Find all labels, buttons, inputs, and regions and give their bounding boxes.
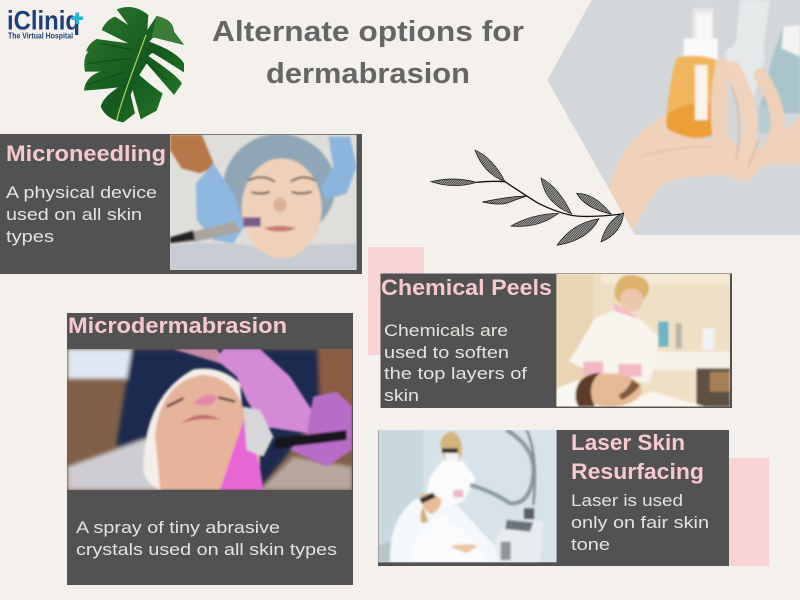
text: chemical peels description: the top layers of	[384, 364, 527, 383]
title: Alternate options for	[212, 16, 524, 48]
text: chemical peels description	[384, 321, 527, 405]
text: microneedling description: used on all skin	[6, 205, 142, 224]
text: laser skin resurfacing description	[571, 491, 709, 554]
heading: laser skin resurfacing: Resurfacing	[571, 459, 704, 484]
photo: chemical peel treatment	[556, 274, 730, 407]
panel: laser skin resurfacing	[378, 430, 729, 566]
photo: hand holding serum bottles	[540, 0, 800, 235]
panel: microneedling: Microneedling	[6, 141, 166, 166]
heading: laser skin resurfacing	[571, 430, 704, 484]
text: microdermabrasion description	[76, 518, 337, 559]
logo: iCliniq: The Virtual Hospital	[8, 32, 73, 40]
title: dermabrasion	[266, 58, 470, 90]
decoration: botanical sprig	[431, 150, 624, 245]
text: laser skin resurfacing description: tone	[571, 535, 610, 554]
text: microneedling description: A physical device	[6, 183, 157, 202]
text: laser skin resurfacing description: Laser is used	[571, 491, 683, 510]
panel: chemical peels	[380, 274, 732, 408]
panel: microdermabrasion	[67, 313, 353, 585]
text: laser skin resurfacing description: only on fair skin	[571, 513, 709, 532]
panel: microneedling	[0, 134, 362, 274]
text: microneedling description: types	[6, 227, 54, 246]
text: chemical peels description: used to soften	[384, 343, 509, 362]
photo: microdermabrasion treatment	[67, 349, 352, 490]
title	[212, 16, 524, 90]
icon: logo plus	[72, 12, 83, 24]
photo: microneedling treatment	[170, 134, 357, 270]
text: chemical peels description: Chemicals are	[384, 321, 508, 340]
text: microneedling description	[6, 183, 157, 246]
text: chemical peels description: skin	[384, 386, 419, 405]
text: microdermabrasion description: A spray of tiny abrasive	[76, 518, 280, 537]
panel: microdermabrasion: Microdermabrasion	[68, 313, 287, 338]
logo: iCliniq: iCliniq	[7, 6, 80, 36]
accent: pink square behind chemical peels	[368, 247, 424, 355]
accent: pink square behind laser skin resurfacing	[729, 458, 769, 566]
text: microdermabrasion description: crystals used on all skin types	[76, 540, 337, 559]
photo: laser skin treatment	[378, 430, 557, 562]
heading: laser skin resurfacing: Laser Skin	[571, 430, 685, 455]
icon: monstera leaf	[84, 7, 184, 122]
panel: chemical peels: Chemical Peels	[381, 275, 552, 300]
